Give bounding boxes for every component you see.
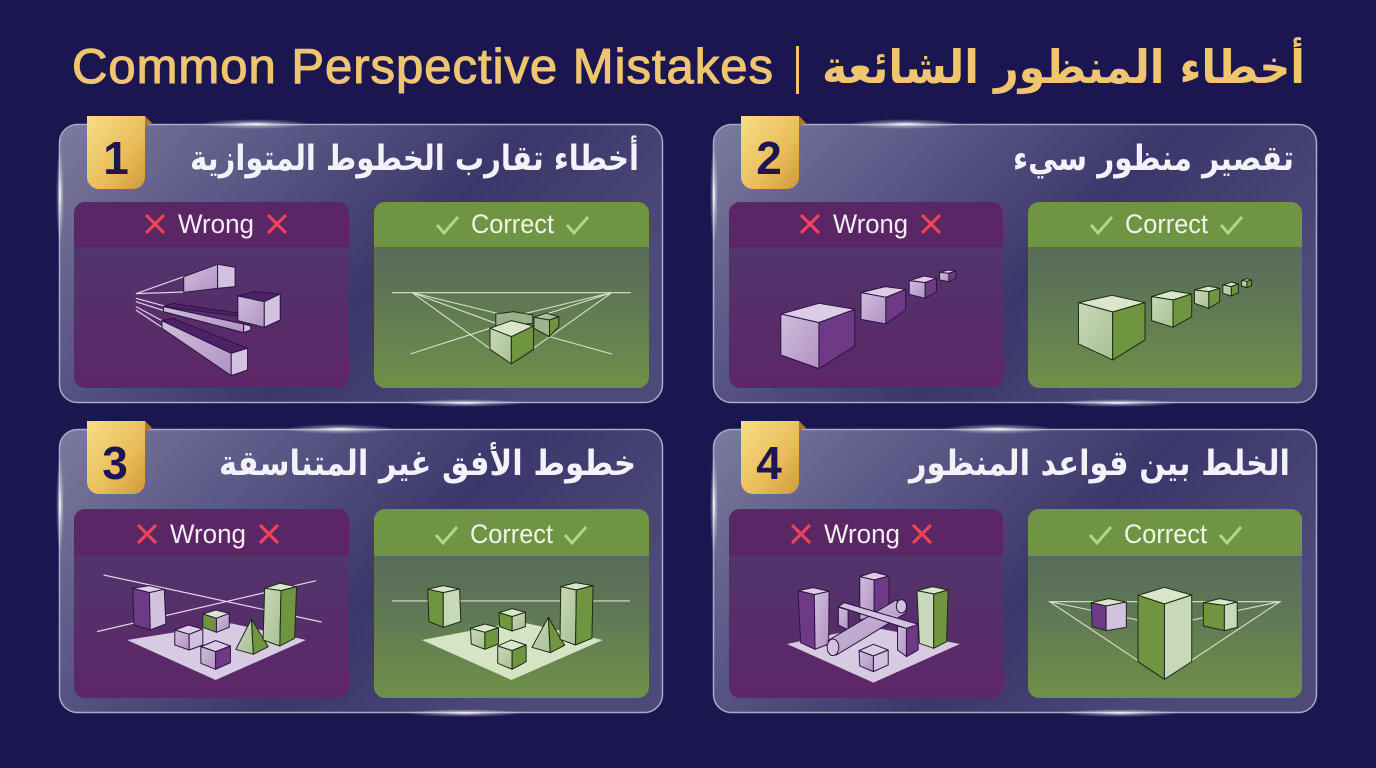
title (72, 37, 1305, 94)
cross icon (801, 215, 819, 233)
panel 3 badge (87, 421, 152, 494)
panel 4 correct box (1028, 509, 1302, 698)
check icon (1090, 527, 1111, 543)
panel 2 badge (741, 116, 806, 189)
check icon (437, 217, 458, 233)
wrong drawing: non-converging boxes (136, 264, 280, 376)
panel 3 glass card (60, 430, 662, 712)
panel 4 heading: الخلط بين قواعد المنظور (907, 444, 1290, 484)
wrong drawing: uneven cubes (781, 270, 956, 369)
wrong label: Wrong (170, 519, 246, 549)
panel 1 (56, 116, 662, 407)
panel 2 correct box (1028, 202, 1302, 388)
correct label: Correct (1124, 519, 1207, 549)
panel 3 (56, 421, 662, 717)
panel 1 badge: 1 (103, 132, 129, 184)
panel 3 heading: خطوط الأفق غير المتناسقة (219, 441, 636, 484)
panel 4 glow (710, 424, 1180, 717)
panel 1 glass card (60, 124, 662, 402)
panel 1 heading: أخطاء تقارب الخطوط المتوازية (190, 135, 639, 179)
panel 1 badge (87, 116, 152, 189)
cross icon (268, 215, 286, 233)
panel 3 glow (56, 424, 525, 717)
wrong label: Wrong (178, 209, 254, 239)
title: Arabic: أخطاء المنظور الشائعة (822, 37, 1305, 94)
check icon (567, 217, 588, 233)
correct label: Correct (471, 209, 554, 239)
panel 4 badge: 4 (756, 437, 782, 489)
cross icon (146, 215, 164, 233)
check icon (1221, 217, 1242, 233)
wrong label: Wrong (824, 519, 900, 549)
check icon (436, 527, 457, 543)
panel 2 glow (710, 119, 1178, 407)
cross icon (922, 215, 940, 233)
panel 4 wrong box (729, 509, 1003, 698)
wrong drawing: conflicting horizons (97, 575, 321, 680)
panel 2 glass card (714, 124, 1316, 402)
correct drawing: one consistent system (1050, 587, 1280, 679)
panel 1 correct box (374, 202, 649, 388)
panel 4 glass card (714, 430, 1316, 712)
cross icon (792, 525, 810, 543)
panel 2 badge: 2 (756, 132, 782, 184)
wrong label: Wrong (833, 209, 908, 239)
check icon (1091, 217, 1112, 233)
title: separator (796, 46, 799, 94)
panel 1 glow (56, 119, 525, 407)
check icon (1220, 527, 1241, 543)
wrong drawing: mixed perspective rules (787, 572, 960, 683)
title: English: Common Perspective Mistakes (72, 40, 773, 94)
panel 2 wrong box (729, 202, 1003, 388)
correct drawing: two-point perspective (392, 293, 631, 364)
cross icon (260, 525, 278, 543)
panel 3 correct box (374, 509, 649, 698)
correct label: Correct (1125, 209, 1208, 239)
check icon (565, 527, 586, 543)
panel 1 wrong box (74, 202, 349, 388)
panel 4 (710, 421, 1316, 717)
panel 2 (710, 116, 1316, 407)
panel 3 wrong box (74, 509, 349, 698)
correct label: Correct (470, 519, 553, 549)
cross icon (913, 525, 931, 543)
correct drawing: shared horizon (392, 583, 630, 680)
panel 4 badge (741, 421, 806, 494)
panel 3 badge: 3 (102, 437, 128, 489)
correct drawing: receding cubes (1078, 279, 1252, 360)
cross icon (138, 525, 156, 543)
panel 2 heading: تقصير منظور سيء (1013, 139, 1294, 179)
